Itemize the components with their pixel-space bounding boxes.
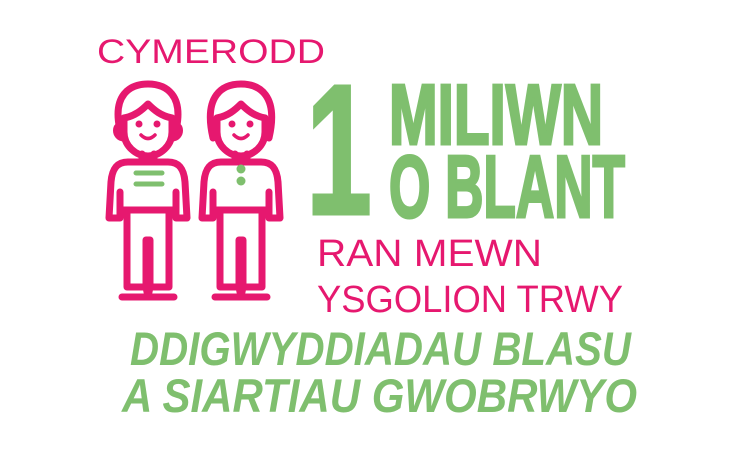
text: RAN MEWN: RAN MEWN <box>317 233 542 275</box>
text: A SIARTIAU GWOBRWYO: A SIARTIAU GWOBRWYO <box>121 369 637 422</box>
text: YSGOLION TRWY: YSGOLION TRWY <box>317 279 623 321</box>
big number 1: 1 <box>306 47 372 254</box>
icon: boy <box>109 84 187 297</box>
icon: girl <box>202 84 280 297</box>
text: MILIWN: MILIWN <box>389 68 603 163</box>
text: DDIGWYDDIADAU BLASU: DDIGWYDDIADAU BLASU <box>130 322 632 375</box>
heading: CYMERODD: CYMERODD <box>97 33 325 71</box>
